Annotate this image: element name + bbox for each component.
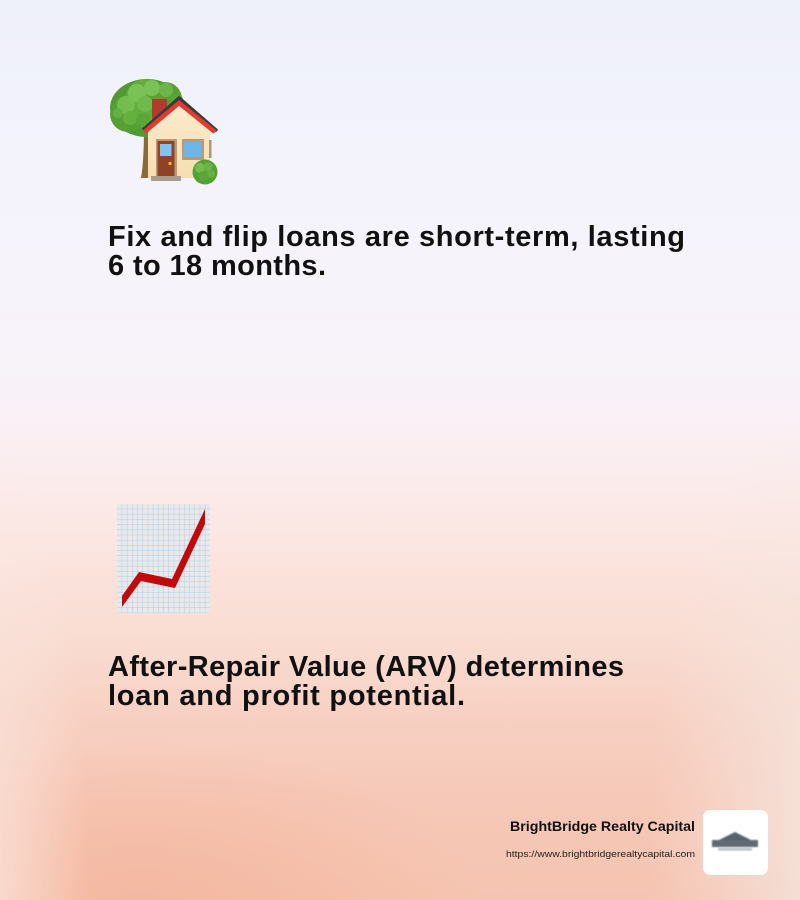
bush — [192, 160, 218, 184]
roof — [143, 98, 217, 131]
heading: after-repair value: loan and profit potential. — [108, 680, 465, 712]
logo mark — [712, 832, 758, 850]
brand name: BrightBridge Realty Capital — [510, 819, 695, 834]
heading: short-term loans: Fix and flip loans are short-term, lasting — [108, 221, 685, 253]
chimney — [152, 99, 167, 123]
house walls — [148, 105, 210, 178]
icon: rising chart — [117, 504, 210, 613]
website url: https://www.brightbridgerealtycapital.com — [506, 849, 695, 860]
heading: after-repair value: After-Repair Value (ARV) determines — [108, 651, 624, 683]
icon: house with tree — [110, 79, 218, 184]
doorstep — [151, 176, 181, 181]
door frame and door — [156, 139, 177, 178]
tree foliage — [110, 79, 184, 137]
chart line — [122, 509, 205, 607]
heading: short-term loans: 6 to 18 months. — [108, 250, 326, 282]
tree trunk — [141, 128, 150, 178]
window — [182, 139, 204, 160]
logo card — [703, 810, 768, 875]
